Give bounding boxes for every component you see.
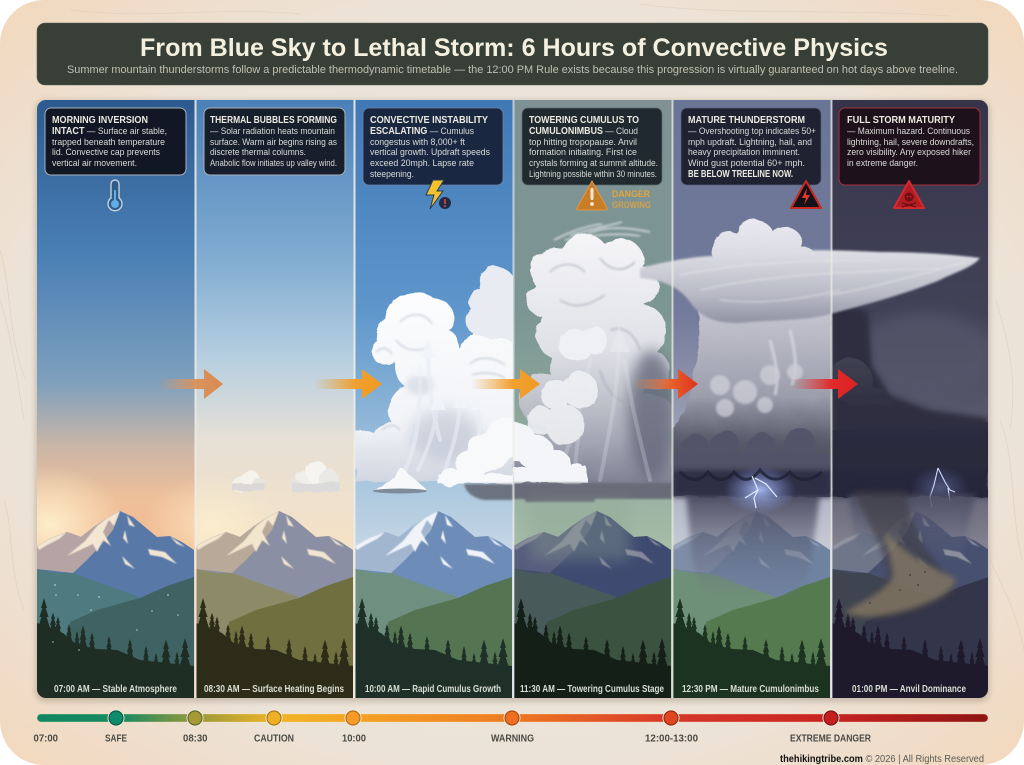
text card: mature thunderstorm: — Overshooting top indicates 50+ xyxy=(688,125,816,136)
icon: skull hazard xyxy=(894,181,924,208)
timeline labels: CAUTION xyxy=(254,734,294,744)
time caption panel 4: 11:30 AM — Towering Cumulus Stage xyxy=(520,684,664,695)
panel 6 sky xyxy=(832,100,988,698)
morning sun glow panel 2 xyxy=(157,490,230,563)
text card: towering cumulus: formation initiating. First ice xyxy=(529,146,637,157)
text card: morning inversion: trapped beneath temperature xyxy=(52,136,165,147)
text card: convective instability: CONVECTIVE INSTABILITY xyxy=(370,115,488,126)
timeline markers xyxy=(108,710,840,726)
mountain landscape panel 4 xyxy=(514,511,671,698)
text card: towering cumulus: crystals forming at summit altitude. xyxy=(529,157,658,168)
dust plume xyxy=(845,530,955,616)
timeline labels xyxy=(34,734,871,744)
text card: convective instability: congestus with 8,000+ ft xyxy=(370,136,465,147)
text card: morning inversion: MORNING INVERSION xyxy=(52,115,148,126)
text card: full storm maturity: FULL STORM MATURITY xyxy=(847,115,955,126)
icon: electrical hazard xyxy=(791,181,821,208)
text card: convective instability: vertical growth. Updraft speeds xyxy=(370,146,490,157)
panel 2 small clouds xyxy=(232,461,340,492)
text card: full storm maturity: zero visibility. Any exposed hiker xyxy=(847,146,971,157)
lower dark band xyxy=(672,470,832,497)
panel 4 sky xyxy=(514,100,673,698)
text card: full storm maturity xyxy=(839,108,980,185)
rain curtain xyxy=(682,495,823,577)
progress arrow 5 xyxy=(792,369,858,399)
text card: mature thunderstorm: Wind gust potential 60+ mph. xyxy=(688,157,805,168)
progress arrow 3 xyxy=(472,369,540,399)
tower right shadow xyxy=(628,350,676,480)
title banner xyxy=(37,23,988,85)
text card: full storm maturity: — Maximum hazard. Continuous xyxy=(847,125,970,136)
text card: full storm maturity: lightning, hail, severe downdrafts, xyxy=(847,136,974,147)
panel 3 cumulus cloud xyxy=(356,265,513,502)
icon: lightning with alert xyxy=(426,180,451,209)
progress arrow 4 xyxy=(632,369,698,399)
icon: danger growing warning xyxy=(577,181,651,211)
text card: towering cumulus: Lightning possible within 30 minutes. xyxy=(529,168,657,179)
text card: thermal bubbles: THERMAL BUBBLES FORMING xyxy=(210,115,337,126)
tower wisps xyxy=(554,222,650,240)
panel dividers xyxy=(194,100,832,698)
mountain landscape panel 2 xyxy=(196,511,353,698)
timeline labels: WARNING xyxy=(491,734,534,744)
danger timeline xyxy=(34,710,988,744)
text card: morning inversion: vertical air movement. xyxy=(52,157,137,168)
icon: danger growing warning: GROWING xyxy=(612,200,651,211)
text card: convective instability: exceed 20mph. Lapse rate xyxy=(370,157,474,168)
panel 2 sky xyxy=(196,100,355,698)
cloud dome and tower xyxy=(672,220,832,497)
back tower xyxy=(465,265,513,376)
dark cloud base xyxy=(513,483,672,502)
text card: thermal bubbles: surface. Warm air begins rising as xyxy=(210,136,337,147)
text card: mature thunderstorm: MATURE THUNDERSTORM xyxy=(688,115,805,126)
text card: thermal bubbles: Anabolic flow initiates up valley wind. xyxy=(210,157,337,168)
updraft arrow head xyxy=(618,327,621,330)
rain shaft xyxy=(848,495,975,560)
icon: thermometer xyxy=(108,180,122,211)
text card: convective instability: steepening. xyxy=(370,168,414,179)
sunrise glow xyxy=(37,475,112,546)
time caption panel 3: 10:00 AM — Rapid Cumulus Growth xyxy=(365,684,501,695)
footer credit: thehikingtribe.com © 2026 | All Rights Reserved xyxy=(780,754,984,765)
main title: From Blue Sky to Lethal Storm: 6 Hours of Convective Physics xyxy=(140,34,888,62)
dark cloud mass xyxy=(828,358,1003,497)
anvil cloud spanning panels xyxy=(640,250,980,323)
small low cumulus xyxy=(376,469,428,491)
timeline labels: 08:30 xyxy=(183,734,208,744)
timeline labels: EXTREME DANGER xyxy=(790,734,871,744)
text card: morning inversion: INTACT — Surface air stable, xyxy=(52,125,167,137)
progress arrow 1 xyxy=(157,369,223,399)
tower highlights xyxy=(710,330,803,417)
text card: mature thunderstorm xyxy=(681,108,821,185)
text card: towering cumulus: CUMULONIMBUS — Cloud xyxy=(529,125,638,137)
mammatus underside xyxy=(680,470,822,480)
text card: towering cumulus: TOWERING CUMULUS TO xyxy=(529,115,639,126)
dark cloud back xyxy=(831,300,988,497)
panel 5 mature thunderstorm xyxy=(672,220,832,600)
panel frame shadow xyxy=(35,100,990,702)
mountain landscape panel 6 xyxy=(832,511,989,698)
progress arrow 2 xyxy=(315,369,382,399)
text card: full storm maturity: in extreme danger. xyxy=(847,157,918,168)
main cumulus body xyxy=(356,292,513,482)
six-stage storm scene xyxy=(0,100,1003,698)
lightning glow xyxy=(910,466,970,510)
tower body xyxy=(512,234,676,486)
dust debris xyxy=(869,571,926,604)
timeline labels: 10:00 xyxy=(342,734,366,744)
time caption panel 5: 12:30 PM — Mature Cumulonimbus xyxy=(682,684,819,695)
panel 6 storm maturity xyxy=(828,300,1003,618)
time caption panel 2: 08:30 AM — Surface Heating Begins xyxy=(204,684,344,695)
icon: danger growing warning: DANGER xyxy=(612,189,650,200)
right low cumulus xyxy=(438,422,513,488)
text card: morning inversion: lid. Convective cap prevents xyxy=(52,146,160,157)
text card: mature thunderstorm: heavy precipitation imminent. xyxy=(688,146,800,157)
mountain landscape panel 5 xyxy=(673,511,830,698)
dark cloud base xyxy=(464,484,513,500)
text card: thermal bubbles: discrete thermal columns. xyxy=(210,146,306,157)
shaded folds xyxy=(550,258,640,405)
panel 5 sky xyxy=(673,100,832,698)
upper lighter cloud xyxy=(855,313,995,397)
text card: thermal bubbles xyxy=(204,108,345,175)
text card: thermal bubbles: — Solar radiation heats mountain xyxy=(210,125,335,136)
hillside sparkles panel 1 xyxy=(52,584,179,651)
time caption panel 1: 07:00 AM — Stable Atmosphere xyxy=(54,684,177,695)
text card: mature thunderstorm: mph updraft. Lightning, hail, and xyxy=(688,136,812,147)
lightning glow xyxy=(724,466,796,514)
lightning bolt xyxy=(930,468,955,507)
cloud puff curls xyxy=(376,315,505,430)
microburst column xyxy=(845,490,955,618)
anvil streaks xyxy=(680,260,965,302)
text card: towering cumulus: top hitting tropopause. Anvil xyxy=(529,136,637,147)
cloud shading xyxy=(406,375,480,461)
text card: mature thunderstorm: BE BELOW TREELINE NOW. xyxy=(688,169,793,180)
mid-level storm clouds xyxy=(672,428,832,497)
text card: convective instability xyxy=(363,108,503,185)
timeline labels: SAFE xyxy=(105,734,127,744)
timeline labels: 12:00-13:00 xyxy=(645,734,698,744)
text card: convective instability: ESCALATING — Cumulus xyxy=(370,125,474,137)
subtitle: Summer mountain thunderstorms follow a predictable thermodynamic timetable — the 12:00 PM Rule exists because this progression is virtually guaranteed on hot days above treeline. xyxy=(67,64,958,76)
time caption panel 6: 01:00 PM — Anvil Dominance xyxy=(852,684,966,695)
mountain landscape panel 3 xyxy=(355,511,512,698)
panel 4 towering cumulus xyxy=(513,220,672,564)
panel 1 sky xyxy=(37,100,196,698)
small cloud base xyxy=(373,488,427,494)
text card: morning inversion xyxy=(45,108,186,175)
text card: towering cumulus xyxy=(522,108,662,185)
updraft arrows xyxy=(564,370,652,482)
timeline labels: 07:00 xyxy=(34,734,58,744)
panel 3 sky xyxy=(355,100,514,698)
mountain landscape panel 1 xyxy=(37,511,194,698)
lightning bolt xyxy=(745,476,777,508)
inner puffs xyxy=(526,327,608,445)
lower cumulus crossing panels xyxy=(513,421,588,484)
updraft arrows xyxy=(405,345,479,470)
rain shaft tint xyxy=(530,500,630,560)
